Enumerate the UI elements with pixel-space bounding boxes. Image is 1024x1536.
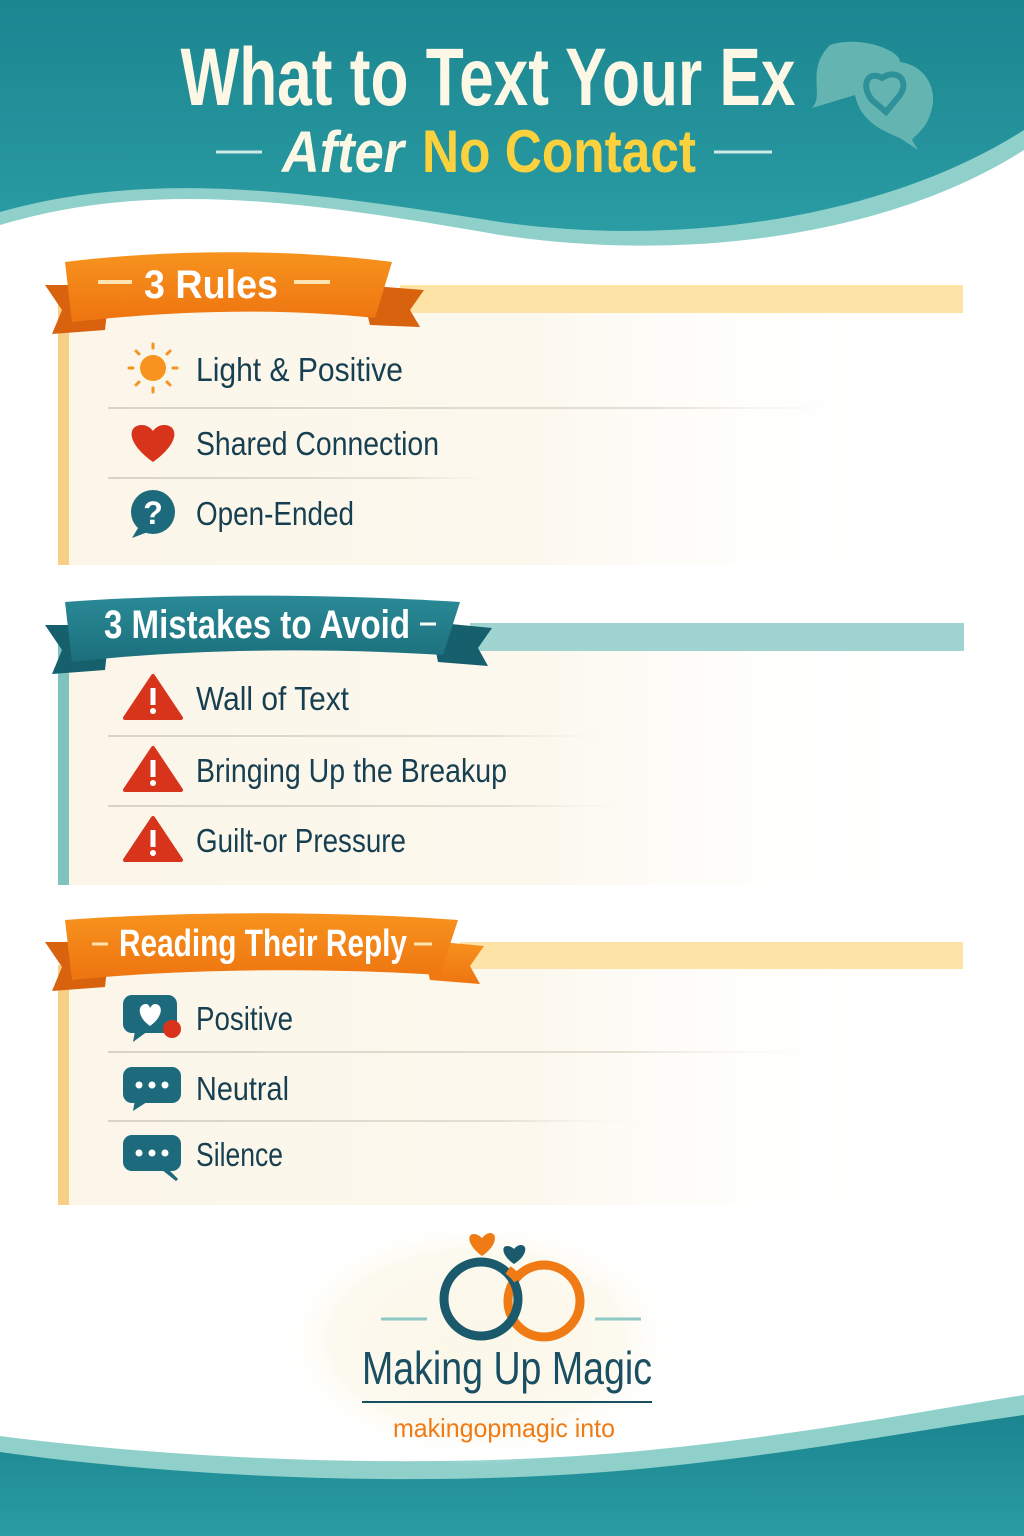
icon: heart speech bubble xyxy=(812,42,933,150)
ribbon: mistakes xyxy=(45,596,492,674)
row: Light & Positive: Light & Positive xyxy=(196,351,403,388)
logo xyxy=(273,1215,683,1465)
row: Open-Ended: Open-Ended xyxy=(196,495,354,532)
row: Positive xyxy=(123,995,293,1042)
row: Open-Ended: ? xyxy=(143,495,163,531)
row: Open-Ended xyxy=(131,490,354,538)
row: Neutral xyxy=(123,1067,289,1111)
row: Silence: Silence xyxy=(196,1136,283,1173)
row: Bringing Up the Breakup xyxy=(125,748,507,790)
row: Guilt-or Pressure xyxy=(125,818,406,860)
url: makingopmagic into xyxy=(393,1413,615,1443)
title xyxy=(180,32,796,185)
ribbon: 3 Rules xyxy=(45,252,424,334)
ribbon: reading reply xyxy=(45,913,484,991)
ribbon: 3 Rules: 3 Rules xyxy=(144,263,278,307)
row: Wall of Text: Wall of Text xyxy=(196,680,349,717)
panel: 3 Mistakes to Avoid xyxy=(45,596,964,885)
panel: Reading Their Reply xyxy=(45,913,963,1205)
row: Bringing Up the Breakup: Bringing Up the Breakup xyxy=(196,752,507,789)
brand name: Making Up Magic xyxy=(362,1342,652,1394)
row: Wall of Text xyxy=(125,676,349,718)
bottom wave xyxy=(0,1395,1024,1536)
title: What to Text Your Ex xyxy=(180,32,796,123)
ribbon: mistakes: 3 Mistakes to Avoid xyxy=(104,603,410,647)
title: After xyxy=(280,120,407,185)
row: Light & Positive xyxy=(129,344,403,392)
header wave xyxy=(0,0,1024,246)
row: Neutral: Neutral xyxy=(196,1070,289,1107)
panel: 3 Rules xyxy=(45,252,963,565)
row: Silence xyxy=(123,1135,283,1180)
ribbon: reading reply: Reading Their Reply xyxy=(119,923,407,965)
row: Shared Connection: Shared Connection xyxy=(196,425,439,462)
row: Positive: Positive xyxy=(196,1000,293,1037)
title: No Contact xyxy=(422,118,696,185)
row: Guilt-or Pressure: Guilt-or Pressure xyxy=(196,822,406,859)
icon: rings and hearts xyxy=(381,1233,641,1337)
